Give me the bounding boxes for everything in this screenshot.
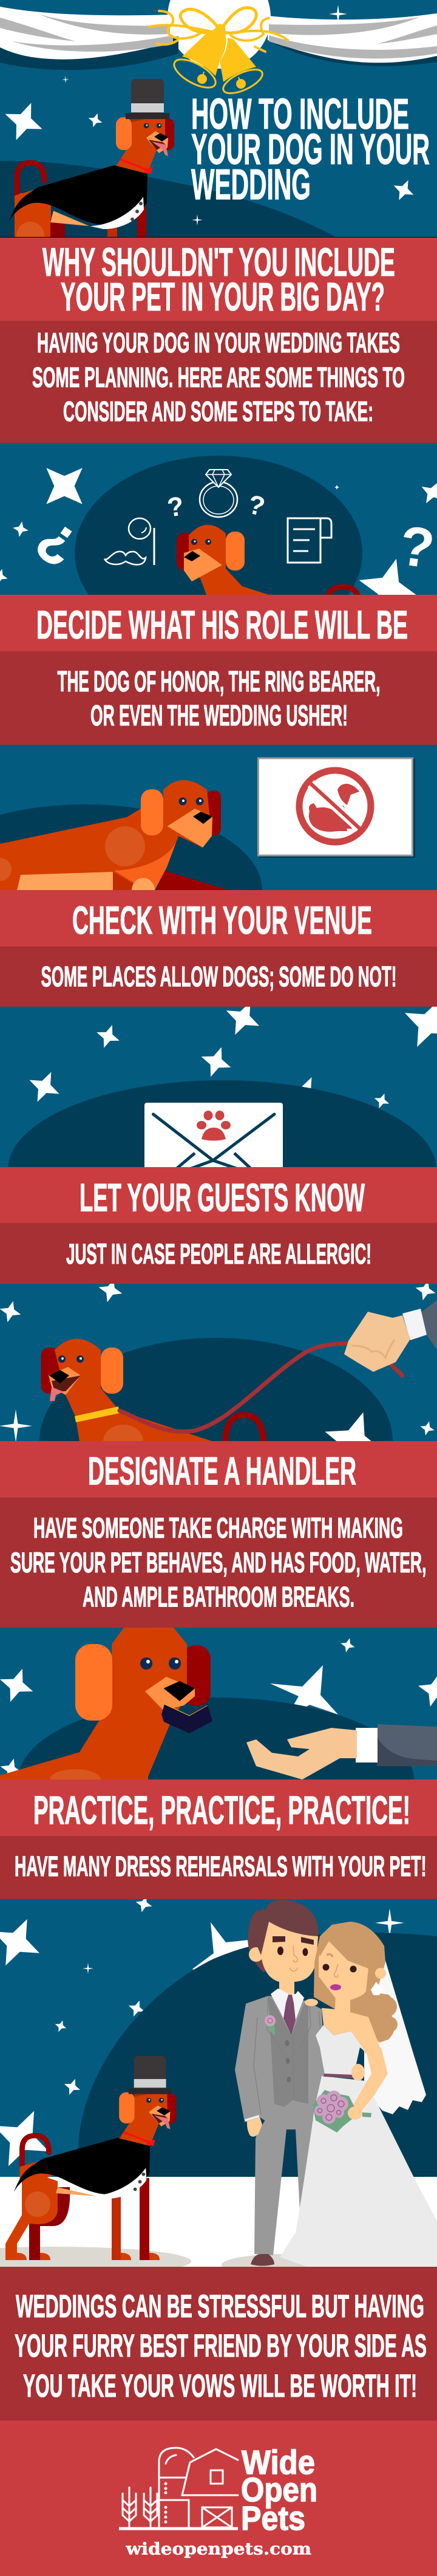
logo wordmark: Wide (242, 2443, 315, 2481)
dark hill (0, 161, 337, 238)
panel: footer (0, 2420, 437, 2576)
right white ribbon (268, 13, 437, 63)
dog in top hat (14, 2056, 176, 2199)
logo wordmark: Pets (241, 2499, 305, 2537)
bow ribbons (149, 8, 288, 52)
question marks: ? (396, 515, 437, 580)
left white ribbon (0, 7, 173, 60)
bride (280, 1922, 437, 2267)
small question marks: ? (245, 490, 268, 522)
bow knot (215, 24, 226, 34)
dog lying down (0, 780, 228, 902)
dark oval (8, 1080, 436, 1259)
header stars (0, 5, 418, 225)
dog tail (328, 587, 358, 598)
bride's face (319, 1941, 368, 2000)
stars (22, 990, 437, 1121)
small question marks (165, 490, 268, 523)
white floor (0, 2177, 437, 2267)
tie (283, 1995, 296, 2035)
no dogs sign (259, 758, 415, 858)
right bell (220, 38, 256, 82)
hand at waist (351, 2064, 365, 2081)
panel: handler scene (0, 1276, 437, 1544)
dress skirt (280, 2076, 437, 2267)
panel: handler band (0, 1441, 437, 1498)
bangs (320, 1922, 385, 1968)
icon: moustache and monocle (104, 518, 154, 565)
icon: paw envelope (144, 1103, 283, 1176)
panel: closing text (0, 2267, 437, 2420)
arm (347, 2047, 388, 2119)
panel: role text (0, 651, 437, 745)
boutonniere (265, 2013, 276, 2035)
bouquet (313, 2090, 371, 2132)
head hair back (248, 1910, 285, 1973)
title: WEDDING (191, 161, 311, 209)
jacket (235, 1996, 325, 2125)
panel: handler text (0, 1498, 437, 1628)
bride's veil (364, 1961, 426, 2114)
trousers (254, 2106, 313, 2255)
icon: paw (197, 1111, 231, 1141)
title (191, 91, 430, 209)
open hand (246, 1724, 437, 1780)
panel: role scene (0, 450, 437, 650)
header rule (0, 237, 437, 238)
dog in tuxedo and top hat (8, 79, 174, 229)
panel: practice text (0, 1836, 437, 1899)
logo wordmark: Open (241, 2470, 317, 2509)
dark swag shadow (0, 36, 437, 70)
panel: couple scene (0, 1894, 437, 2276)
hair top (254, 1900, 318, 1955)
sash (324, 2074, 353, 2078)
dark hill (78, 1933, 437, 2177)
stars (0, 1276, 437, 1442)
dress bodice (316, 2025, 365, 2076)
dark oval (39, 1338, 393, 1544)
leash (120, 1343, 402, 1431)
floor shadows (0, 2247, 349, 2276)
logo wordmark (241, 2443, 317, 2537)
right ribbon folds (269, 17, 437, 58)
dog lower body (5, 2169, 160, 2260)
left ribbon folds (0, 13, 173, 52)
earring (371, 1982, 382, 1995)
dark oval (75, 456, 362, 650)
face (261, 1922, 318, 1982)
dark oval (18, 1697, 414, 1862)
shoe (251, 2254, 274, 2266)
vest (268, 1996, 308, 2107)
dog with ring box (0, 1627, 212, 1790)
panel: venue text (0, 947, 437, 1007)
ring box (161, 1704, 212, 1733)
panel: why band (0, 237, 437, 321)
left bell (182, 26, 226, 76)
icon: diamond ring (200, 470, 237, 517)
small star (371, 1091, 392, 1111)
dog head looking up (177, 525, 269, 595)
eyes (277, 1947, 283, 1955)
panel: intro text (0, 321, 437, 443)
icon: no dogs (299, 770, 371, 842)
white moon (168, 0, 271, 69)
dog on a leash (41, 1339, 212, 1458)
handler's hand (344, 1300, 437, 1372)
stars (0, 450, 437, 625)
icon: scroll document (288, 518, 331, 563)
stars behind hill (0, 1894, 404, 2179)
big star (316, 1403, 392, 1479)
back hair (314, 1922, 395, 2043)
panel: header scene (0, 0, 437, 250)
panel: venue band (0, 890, 437, 947)
panel: guests scene (8, 990, 437, 1259)
website url: wideopenpets.com (125, 2540, 311, 2559)
panel: venue scene (0, 758, 415, 976)
golden bells and bow (149, 8, 288, 98)
stars behind oval (0, 1636, 437, 1783)
panel: practice scene (0, 1627, 437, 1862)
nose and smile (290, 1946, 298, 1971)
panel: guests band (0, 1167, 437, 1223)
groom's hand (247, 2117, 262, 2137)
small question marks: ? (165, 491, 186, 523)
shirt collar (271, 1989, 304, 2035)
dark oval (0, 804, 262, 976)
dog tail (225, 1415, 263, 1445)
groom's hand on shoulder (305, 1999, 318, 2006)
dog in tuxedo lower body (15, 193, 146, 250)
logo: barn and wheat (119, 2448, 238, 2529)
groom (235, 1900, 325, 2266)
question marks (25, 509, 437, 580)
neck and shoulders (322, 1993, 382, 2054)
heading: why (42, 239, 395, 319)
eyes and mouth (323, 1964, 329, 1971)
panel: guests text (0, 1223, 437, 1284)
eyebrows (273, 1936, 314, 1945)
neck (279, 1975, 294, 1996)
question marks: ? (25, 509, 88, 579)
